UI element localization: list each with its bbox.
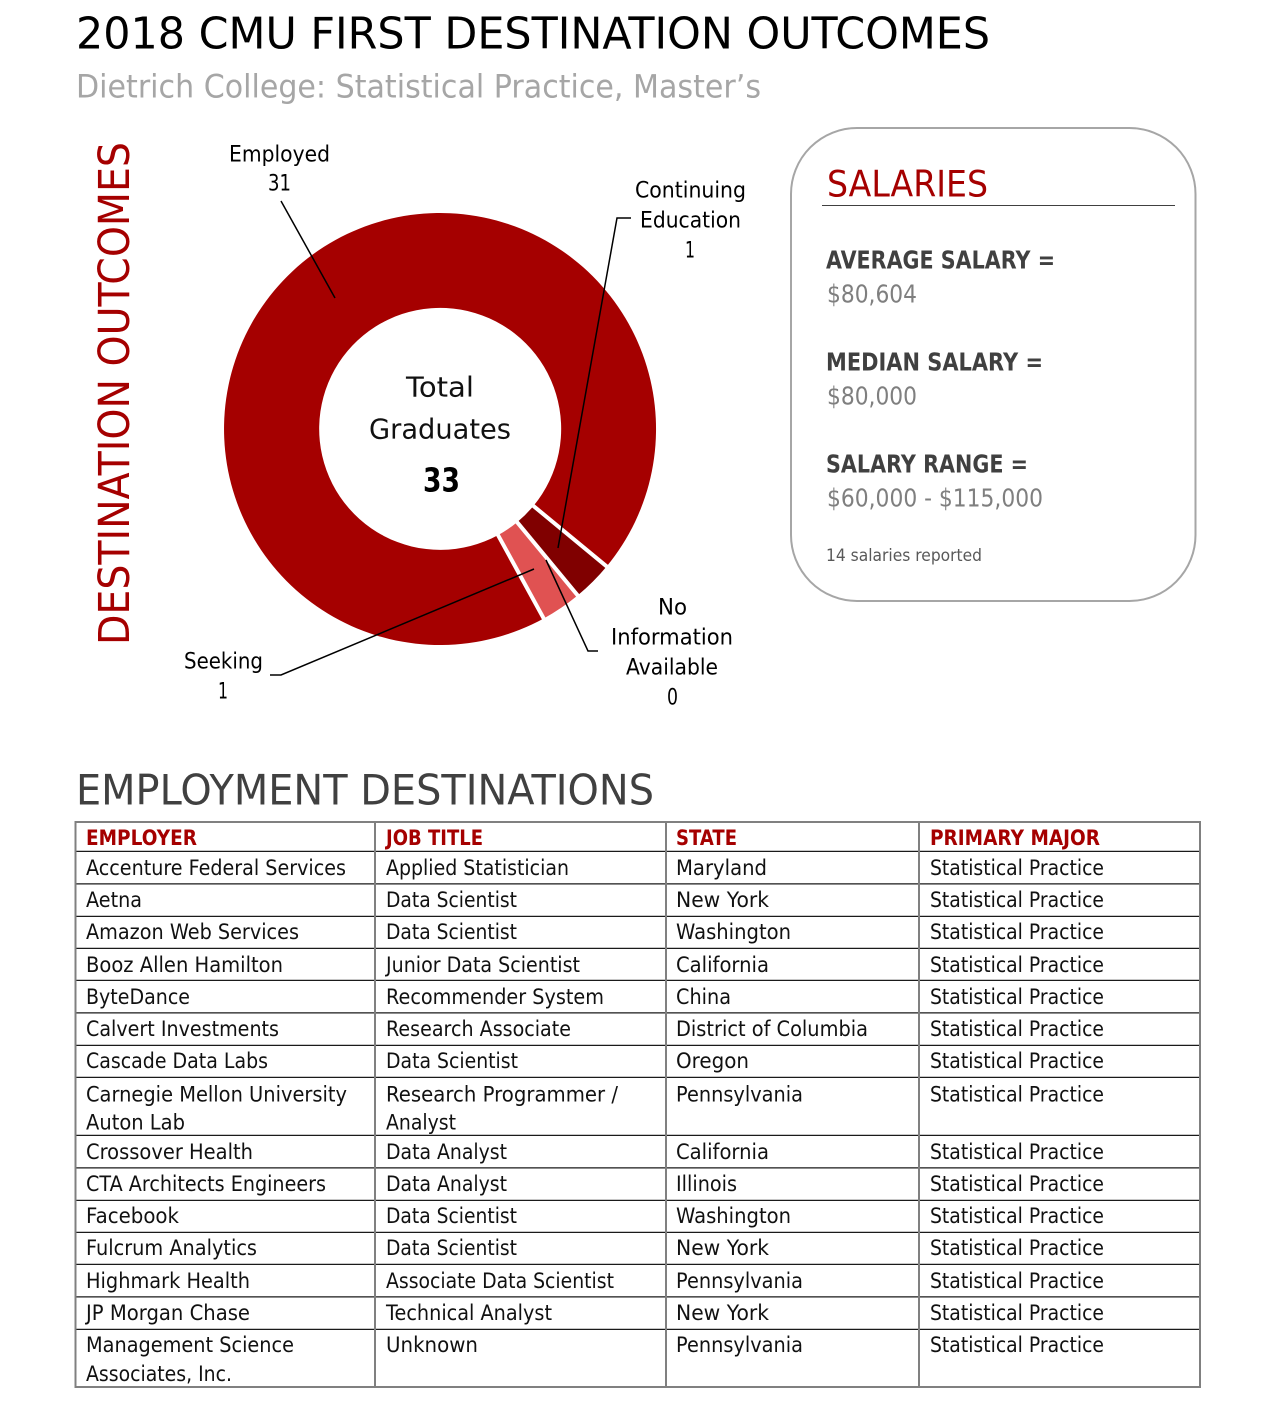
vertical heading: destination outcomes: DESTINATION OUTCOMES	[90, 142, 140, 645]
table header row: PRIMARY MAJOR	[930, 826, 1100, 851]
row: Cascade: Cascade Data Labs	[86, 1049, 268, 1074]
row: Management Science	[86, 1333, 1104, 1387]
label: continuing education	[635, 178, 746, 264]
row: Accenture: Statistical Practice	[930, 856, 1104, 881]
row: Accenture: Applied Statistician	[386, 856, 569, 881]
row: CTA: Illinois	[676, 1172, 737, 1197]
label: no information available: Information	[611, 626, 733, 650]
row: CTA: CTA Architects Engineers	[86, 1172, 326, 1197]
leader line: seeking	[270, 569, 534, 675]
row: Calvert: Statistical Practice	[930, 1017, 1104, 1042]
row: Management Science: Pennsylvania	[676, 1333, 803, 1358]
row: CTA	[86, 1172, 1104, 1197]
donut chart	[224, 213, 656, 645]
panel outline	[791, 128, 1196, 601]
row: JP Morgan	[84, 1301, 1104, 1326]
employment table	[75, 821, 1201, 1388]
row: Fulcrum: Data Scientist	[386, 1236, 517, 1261]
row: Aetna	[86, 888, 1104, 913]
salaries reported note: 14 salaries reported	[826, 546, 982, 565]
row: Highmark: Highmark Health	[86, 1269, 250, 1294]
title: 2018 CMU FIRST DESTINATION OUTCOMES	[76, 10, 990, 60]
row: Highmark: Statistical Practice	[930, 1269, 1104, 1294]
row: ByteDance	[86, 985, 1104, 1010]
row: Calvert	[86, 1017, 1104, 1042]
table header row	[86, 826, 1100, 851]
row: JP Morgan: Statistical Practice	[930, 1301, 1104, 1326]
label: continuing education: 1	[685, 238, 695, 264]
slice: seeking	[498, 522, 578, 618]
table header row: STATE	[676, 826, 737, 851]
row: Management Science: Unknown	[386, 1333, 478, 1358]
table header row: EMPLOYER	[86, 826, 197, 851]
row: Carnegie Mellon: Statistical Practice	[930, 1082, 1104, 1108]
average salary	[826, 246, 1055, 308]
row: Calvert: District of Columbia	[676, 1017, 868, 1042]
row: Amazon: Amazon Web Services	[86, 920, 299, 945]
row: Crossover: Data Analyst	[386, 1140, 507, 1165]
salary range: SALARY RANGE =	[826, 450, 1028, 478]
row: Facebook: Data Scientist	[386, 1204, 517, 1229]
row: Cascade: Data Scientist	[386, 1049, 518, 1074]
row: Carnegie Mellon: Analyst	[386, 1110, 456, 1136]
leader line: continuing education	[558, 218, 631, 548]
average salary: AVERAGE SALARY =	[826, 246, 1055, 274]
row: ByteDance: Statistical Practice	[930, 985, 1104, 1010]
panel heading: SALARIES	[827, 162, 988, 206]
row: Amazon	[86, 920, 1104, 945]
row: JP Morgan: New York	[676, 1301, 770, 1326]
row: Carnegie Mellon: Research Programmer /	[386, 1082, 619, 1108]
row: Accenture	[86, 856, 1104, 881]
donut centre label	[369, 370, 511, 500]
heading: employment destinations: EMPLOYMENT DESTINATIONS	[76, 766, 654, 814]
row: Cascade	[86, 1049, 1104, 1074]
panel: salaries	[791, 128, 1196, 601]
row: ByteDance: China	[676, 985, 731, 1010]
label: continuing education: Education	[640, 208, 741, 234]
row: Booz Allen: Junior Data Scientist	[384, 953, 580, 978]
label: employed: Employed	[229, 142, 330, 168]
leader line: employed	[281, 201, 335, 298]
row: Calvert: Calvert Investments	[86, 1017, 279, 1042]
row: Facebook: Facebook	[86, 1204, 179, 1229]
average salary: $80,604	[827, 280, 917, 308]
row: JP Morgan: JP Morgan Chase	[84, 1301, 250, 1326]
row: Crossover: Statistical Practice	[930, 1140, 1104, 1165]
median salary: MEDIAN SALARY =	[826, 348, 1043, 376]
row: Carnegie Mellon: Pennsylvania	[676, 1082, 803, 1108]
slice: continuing education	[517, 506, 607, 595]
row: Crossover: Crossover Health	[86, 1140, 253, 1165]
label: seeking	[184, 650, 263, 704]
row: Management Science: Associates, Inc.	[86, 1362, 232, 1387]
donut centre label: Total	[405, 370, 474, 404]
row: Amazon: Statistical Practice	[930, 920, 1104, 945]
label: employed	[229, 142, 330, 196]
row: ByteDance: ByteDance	[86, 985, 190, 1010]
row: Cascade: Statistical Practice	[930, 1049, 1104, 1074]
median salary: $80,000	[827, 382, 917, 410]
row: Calvert: Research Associate	[386, 1017, 571, 1042]
heading rule	[822, 204, 1175, 206]
label: no information available: Available	[626, 656, 718, 680]
row: Facebook: Washington	[676, 1204, 791, 1229]
row: Carnegie Mellon: Auton Lab	[86, 1110, 185, 1136]
row: Amazon: Data Scientist	[386, 920, 517, 945]
row: Management Science: Management Science	[86, 1333, 294, 1358]
row: Crossover	[86, 1140, 1104, 1165]
row: Booz Allen: California	[676, 953, 769, 978]
subtitle: Dietrich College: Statistical Practice, Master’s	[76, 68, 761, 106]
row: Aetna: Aetna	[86, 888, 142, 913]
row: CTA: Data Analyst	[386, 1172, 507, 1197]
row: Fulcrum: New York	[676, 1236, 770, 1261]
label: no information available: No	[658, 596, 687, 620]
label: seeking: Seeking	[184, 650, 263, 674]
label: no information available: 0	[667, 686, 678, 710]
leader line: no information available	[546, 560, 598, 651]
row: Facebook	[86, 1204, 1104, 1229]
row: Highmark: Pennsylvania	[676, 1269, 803, 1294]
row: Carnegie Mellon	[86, 1082, 1104, 1136]
median salary	[826, 348, 1043, 410]
slice: employed	[224, 213, 656, 645]
row: Aetna: Data Scientist	[386, 888, 517, 913]
row: Accenture: Maryland	[676, 856, 767, 881]
table grid	[75, 821, 1201, 1388]
row: Aetna: New York	[676, 888, 770, 913]
row: Booz Allen: Booz Allen Hamilton	[86, 953, 283, 978]
row: Highmark: Associate Data Scientist	[386, 1269, 614, 1294]
row: Accenture: Accenture Federal Services	[86, 856, 346, 881]
label: continuing education: Continuing	[635, 178, 746, 204]
row: Amazon: Washington	[676, 920, 791, 945]
label: seeking: 1	[218, 680, 228, 704]
salary range: $60,000 - $115,000	[827, 484, 1043, 512]
row: Booz Allen	[86, 953, 1104, 978]
row: Fulcrum: Fulcrum Analytics	[86, 1236, 257, 1261]
row: Management Science: Statistical Practice	[930, 1333, 1104, 1358]
donut centre label: Graduates	[369, 412, 511, 446]
row: Crossover: California	[676, 1140, 769, 1165]
row: Booz Allen: Statistical Practice	[930, 953, 1104, 978]
row: Fulcrum: Statistical Practice	[930, 1236, 1104, 1261]
label: employed: 31	[268, 172, 291, 196]
row: Cascade: Oregon	[676, 1049, 749, 1074]
row: Highmark	[86, 1269, 1104, 1294]
donut centre label: 33	[423, 462, 460, 500]
row: Facebook: Statistical Practice	[930, 1204, 1104, 1229]
row: Carnegie Mellon: Carnegie Mellon University	[86, 1082, 347, 1108]
row: JP Morgan: Technical Analyst	[385, 1301, 552, 1326]
row: ByteDance: Recommender System	[386, 985, 604, 1010]
salary range	[826, 450, 1043, 512]
table header row: JOB TITLE	[384, 826, 483, 851]
label: no information available	[611, 596, 733, 710]
row: CTA: Statistical Practice	[930, 1172, 1104, 1197]
row: Fulcrum	[86, 1236, 1104, 1261]
row: Aetna: Statistical Practice	[930, 888, 1104, 913]
